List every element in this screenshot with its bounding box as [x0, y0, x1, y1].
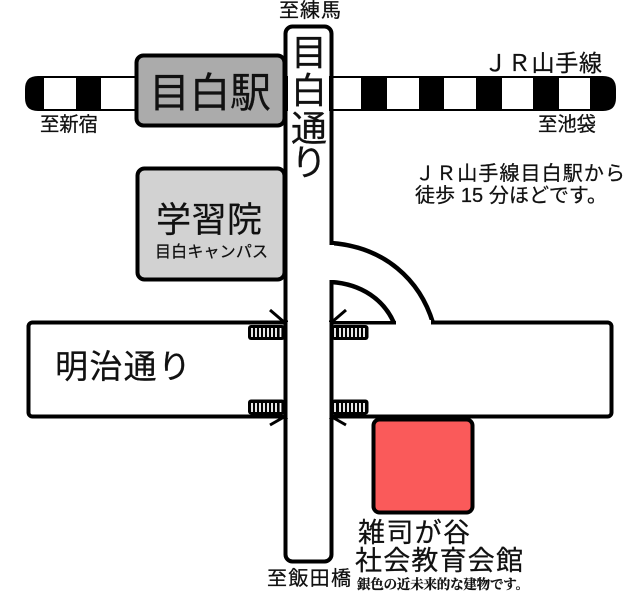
access note: 徒歩 15 分ほどです。	[415, 184, 607, 207]
Gakushuin campus box: 学習院	[156, 201, 262, 240]
label: to Nerima: 至練馬	[279, 0, 341, 22]
curved side road	[330, 241, 433, 323]
label: to Iidabashi: 至飯田橋	[267, 567, 351, 590]
label: JR Yamanote line: ＪＲ山手線	[484, 50, 602, 76]
railway line: JR Yamanote	[25, 76, 616, 111]
building name	[355, 518, 523, 576]
pedestrian crossing: upper left	[248, 325, 285, 340]
Meiji-dori road: 明治通り	[55, 348, 191, 385]
building name: 雑司が谷	[358, 518, 470, 548]
Mejiro-dori road	[286, 26, 332, 562]
red building: Zoshigaya community hall	[374, 420, 472, 512]
label: to Ikebukuro: 至池袋	[538, 113, 596, 136]
Mejiro station box	[136, 56, 284, 126]
label: to Shinjuku: 至新宿	[40, 113, 98, 136]
pedestrian crossing: lower left	[248, 400, 285, 414]
building note: 銀色の近未来的な建物です。	[357, 576, 529, 592]
Mejiro-dori road: 白	[291, 70, 327, 111]
arrows at the junction	[270, 310, 346, 425]
Mejiro-dori road: 通	[291, 108, 327, 149]
Mejiro-dori road: 目	[291, 32, 327, 73]
Mejiro station box: 目白駅	[149, 70, 271, 116]
Gakushuin campus box: 目白キャンパス	[155, 243, 268, 261]
Meiji-dori road	[28, 322, 612, 416]
pedestrian crossing: upper right	[332, 325, 368, 340]
pedestrian crossing: lower right	[332, 400, 368, 414]
Mejiro-dori road: り	[291, 142, 327, 183]
access note	[415, 162, 625, 207]
Gakushuin campus box	[138, 168, 284, 280]
access note: ＪＲ山手線目白駅から	[415, 162, 625, 185]
building name: 社会教育会館	[355, 546, 523, 576]
